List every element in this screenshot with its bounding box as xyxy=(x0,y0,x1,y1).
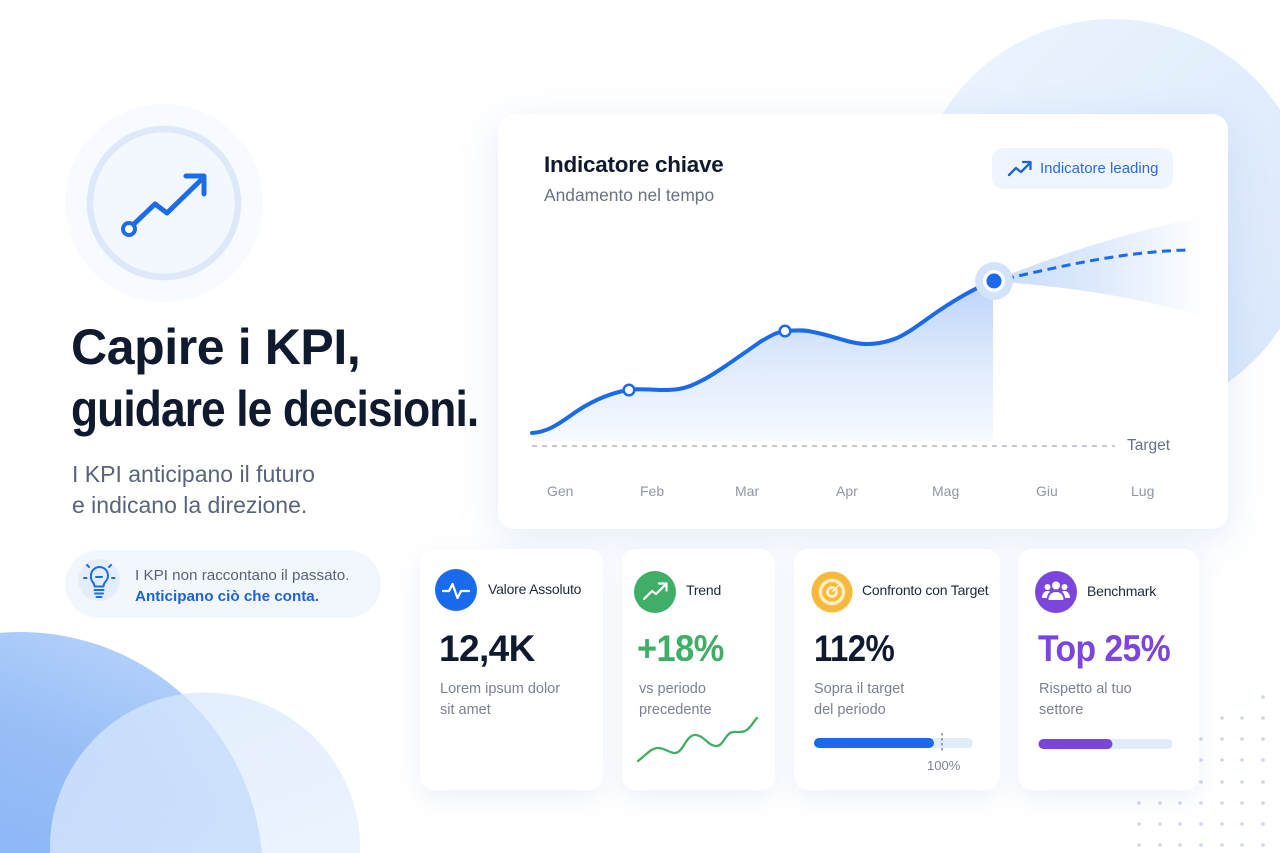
line chart: Apr xyxy=(836,483,858,499)
card label: Benchmark xyxy=(1087,583,1156,599)
card description xyxy=(1039,681,1132,718)
card value: 112% xyxy=(814,628,894,669)
card description: del periodo xyxy=(814,702,886,718)
card description: sit amet xyxy=(440,702,491,718)
chart subheading: Andamento nel tempo xyxy=(544,185,714,205)
card description xyxy=(639,681,712,718)
icon: green trend xyxy=(634,571,676,613)
card value: Top 25% xyxy=(1038,628,1170,669)
card description: Lorem ipsum dolor xyxy=(440,681,560,697)
card description xyxy=(814,681,904,718)
sparkline xyxy=(636,716,758,762)
title: Capire i KPI, xyxy=(71,319,360,375)
line chart: Lug xyxy=(1131,483,1154,499)
chart heading: Indicatore chiave xyxy=(544,152,724,177)
callout text: Anticipano ciò che conta. xyxy=(135,588,319,605)
callout text xyxy=(135,567,349,605)
line chart: Giu xyxy=(1036,483,1058,499)
card description: Sopra il target xyxy=(814,681,904,697)
card value: 12,4K xyxy=(439,628,535,669)
line chart: Mar xyxy=(735,483,759,499)
icon: small trend arrow xyxy=(1008,160,1032,176)
subtitle: e indicano la direzione. xyxy=(72,492,307,518)
card description: Rispetto al tuo xyxy=(1039,681,1132,697)
line chart: Mag xyxy=(932,483,959,499)
icon: pulse xyxy=(435,569,477,611)
card description xyxy=(440,681,560,718)
title xyxy=(71,319,478,437)
card description: precedente xyxy=(639,702,712,718)
card description: vs periodo xyxy=(639,681,706,697)
progress bar xyxy=(1038,739,1172,749)
badge: leading indicator xyxy=(992,148,1173,189)
badge label: Indicatore leading xyxy=(1040,160,1158,177)
card description: settore xyxy=(1039,702,1083,718)
icon: group xyxy=(1035,571,1077,613)
panel: main chart xyxy=(498,114,1228,529)
card label: Valore Assoluto xyxy=(488,581,581,597)
panel: trend xyxy=(622,549,775,790)
card label: Trend xyxy=(686,582,721,598)
panel: confronto con target xyxy=(794,549,1000,790)
title: guidare le decisioni. xyxy=(71,381,478,437)
line chart: Target xyxy=(1127,437,1171,454)
icon: growth arrow in circle xyxy=(86,126,242,280)
line chart: Feb xyxy=(640,483,664,499)
subtitle: I KPI anticipano il futuro xyxy=(72,461,315,487)
progress bar: 100% xyxy=(927,758,961,773)
line chart xyxy=(530,222,1186,499)
card label: Confronto con Target xyxy=(862,582,988,598)
callout text: I KPI non raccontano il passato. xyxy=(135,567,349,584)
icon: target xyxy=(812,572,852,612)
subtitle xyxy=(72,461,315,518)
line chart: Gen xyxy=(547,483,573,499)
progress bar xyxy=(814,733,973,773)
panel: valore assoluto xyxy=(420,549,603,790)
card value: +18% xyxy=(637,628,724,669)
callout: insight pill xyxy=(65,550,381,618)
panel: benchmark xyxy=(1018,549,1199,790)
icon: light bulb xyxy=(78,559,120,601)
